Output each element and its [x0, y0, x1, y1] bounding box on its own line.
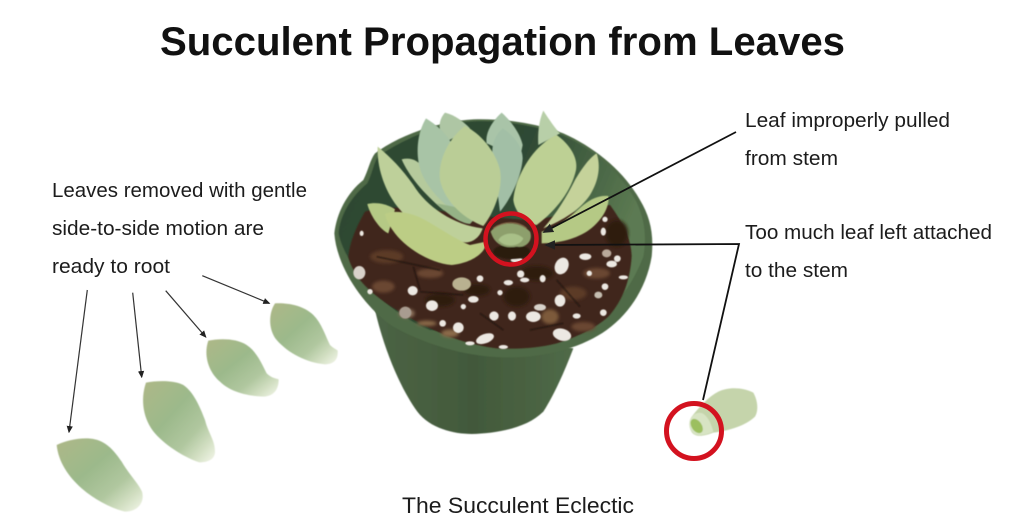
potted succulent photo: [334, 111, 652, 434]
right small leaf: [543, 153, 599, 228]
pot rim: [334, 119, 652, 357]
credit: The Succulent Eclectic: [402, 493, 634, 518]
leaf 3: [206, 339, 279, 397]
center leaf: [440, 126, 501, 226]
pot body: [375, 310, 573, 434]
red circle on leaf: [666, 404, 722, 458]
shadow and stem: [493, 244, 530, 259]
left big leaf: [378, 147, 483, 242]
right lower leaf: [542, 196, 609, 243]
leaf 1: [57, 438, 143, 512]
left callout text: ready to root: [52, 256, 170, 278]
annotation arrow: leaf improperly pulled: [544, 132, 736, 232]
right callout: too much leaf: [745, 222, 992, 282]
right callout: leaf improperly pulled: [745, 110, 950, 170]
perlite: [353, 217, 628, 349]
succulent rosette: [367, 111, 609, 265]
annotation arrow: too much leaf left attached: [546, 244, 739, 400]
leaf 2: [143, 381, 215, 462]
right big leaf: [513, 135, 576, 225]
left back low leaf: [367, 203, 395, 233]
back leaves: [440, 113, 470, 142]
right callout: leaf improperly pulled: Leaf improperly pulled: [745, 110, 950, 132]
right callout: too much leaf: to the stem: [745, 260, 848, 282]
left callout text: [52, 180, 307, 278]
right callout: too much leaf: Too much leaf left attached: [745, 222, 992, 244]
left front leaf: [385, 212, 486, 265]
four rooted leaves: [57, 303, 338, 512]
pot inner wall: [339, 121, 645, 338]
left callout text: Leaves removed with gentle: [52, 180, 307, 202]
damaged leaf with stem piece: [688, 388, 757, 436]
right callout: leaf improperly pulled: from stem: [745, 148, 838, 170]
soil: [348, 205, 632, 349]
left callout text: side-to-side motion are: [52, 218, 264, 240]
leaf 4: [270, 303, 338, 364]
red circle on stem: [486, 214, 536, 264]
title: Succulent Propagation from Leaves: [160, 20, 845, 64]
arrows to leaves: [69, 276, 269, 432]
